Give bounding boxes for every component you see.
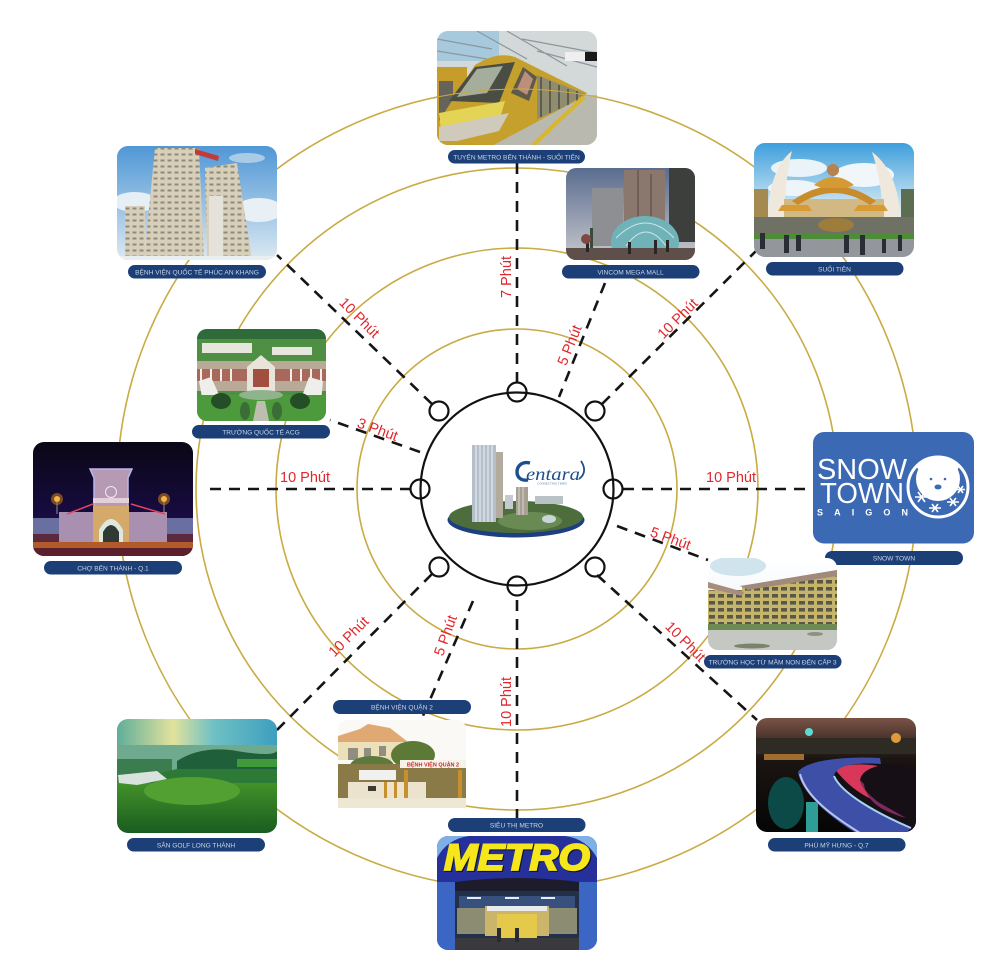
travel time labels: 10 Phút — [326, 614, 373, 661]
panel: Trường học từ mầm non đến cấp 3 — [704, 556, 842, 668]
label — [768, 838, 906, 852]
label — [128, 265, 266, 278]
label: BỆNH VIỆN QUẬN 2 — [371, 702, 433, 712]
travel time labels: 10 Phút — [661, 619, 708, 666]
travel time labels — [280, 256, 756, 727]
travel time labels: 3 Phút — [355, 416, 400, 445]
distance rings — [117, 89, 917, 889]
photo: Suoi Tien gate — [754, 143, 915, 257]
label — [44, 561, 182, 574]
label — [448, 150, 585, 164]
panel: Siêu thị Metro — [437, 818, 597, 951]
panel: Chợ Bến Thành - Q.1 — [33, 442, 193, 574]
logo: Snow Town Saigon: TOWN — [820, 478, 904, 510]
label — [448, 818, 586, 832]
panel: Bệnh viện Quận 2 — [333, 700, 471, 808]
photo: ACG campus — [197, 329, 326, 421]
photo: golf course — [117, 719, 277, 833]
label: SÂN GOLF LONG THÀNH — [157, 840, 235, 849]
photo: metro train — [437, 31, 597, 145]
panel: Vincom Mega Mall — [562, 168, 700, 278]
label: VINCOM MEGA MALL — [597, 269, 664, 276]
towers — [472, 445, 563, 522]
label — [127, 838, 265, 852]
label: SNOW TOWN — [873, 556, 915, 562]
logo: Snow Town Saigon: SAIGON — [817, 508, 908, 518]
photo: Metro supermarket: METRO — [444, 837, 590, 878]
Centara logo: entara — [526, 464, 580, 484]
photo: Ben Thanh market at night — [33, 442, 193, 556]
panel: Tuyến Metro Bến Thành - Suối Tiên — [437, 31, 597, 164]
photo: Vincom towers and glass dome — [566, 168, 695, 268]
travel time labels: 10 Phút — [335, 295, 382, 342]
panel: Trường Quốc tế ACG — [192, 329, 330, 438]
label: SIÊU THỊ METRO — [490, 820, 543, 830]
photo: Metro supermarket — [437, 836, 597, 951]
island — [448, 501, 584, 538]
centre project illustration: Centara — [448, 445, 584, 538]
panel: Sân Golf Long Thành — [117, 719, 277, 852]
travel time labels: 5 Phút — [648, 525, 693, 554]
photo: school — [708, 556, 837, 650]
Centara logo: CONNECTING TIMES — [537, 482, 567, 486]
label: TRƯỜNG HỌC TỪ MẦM NON ĐẾN CẤP 3 — [708, 656, 837, 666]
label: SUỐI TIÊN — [818, 263, 851, 273]
label: PHÚ MỸ HƯNG - Q.7 — [804, 840, 869, 849]
travel time labels: 10 Phút — [706, 470, 756, 486]
centre hub circle with node markers — [410, 382, 622, 596]
label: CHỢ BẾN THÀNH - Q.1 — [77, 562, 149, 572]
photo: district 2 hospital: BỆNH VIỆN QUẬN 2 — [407, 760, 459, 768]
photo: hospital towers — [113, 146, 283, 260]
label — [825, 551, 963, 565]
travel time labels: 7 Phút — [499, 256, 515, 298]
panel: Suối Tiên — [754, 143, 915, 276]
dashed connector lines — [204, 163, 810, 820]
label — [766, 262, 904, 276]
travel time labels: 10 Phút — [499, 677, 515, 727]
panel: Bệnh viện Quốc tế Phúc An Khang — [113, 146, 283, 278]
label: TUYẾN METRO BẾN THÀNH - SUỐI TIÊN — [453, 151, 580, 161]
icon: polar bear — [908, 457, 968, 517]
travel time labels: 5 Phút — [555, 323, 586, 368]
logo: Snow Town Saigon: SNOW — [817, 454, 908, 486]
Centara logo — [517, 461, 584, 486]
travel time labels: 10 Phút — [655, 296, 702, 343]
label: TRƯỜNG QUỐC TẾ ACG — [222, 426, 300, 436]
logo: Snow Town Saigon — [813, 432, 974, 544]
label: BỆNH VIỆN QUỐC TẾ PHÚC AN KHANG — [135, 266, 259, 276]
panel: Snow Town — [813, 432, 974, 565]
travel time labels: 5 Phút — [432, 613, 461, 658]
panel: Phú Mỹ Hưng - Q.7 — [756, 718, 917, 852]
travel time labels: 10 Phút — [280, 470, 330, 486]
photo: Phu My Hung bridge at night — [756, 718, 917, 834]
